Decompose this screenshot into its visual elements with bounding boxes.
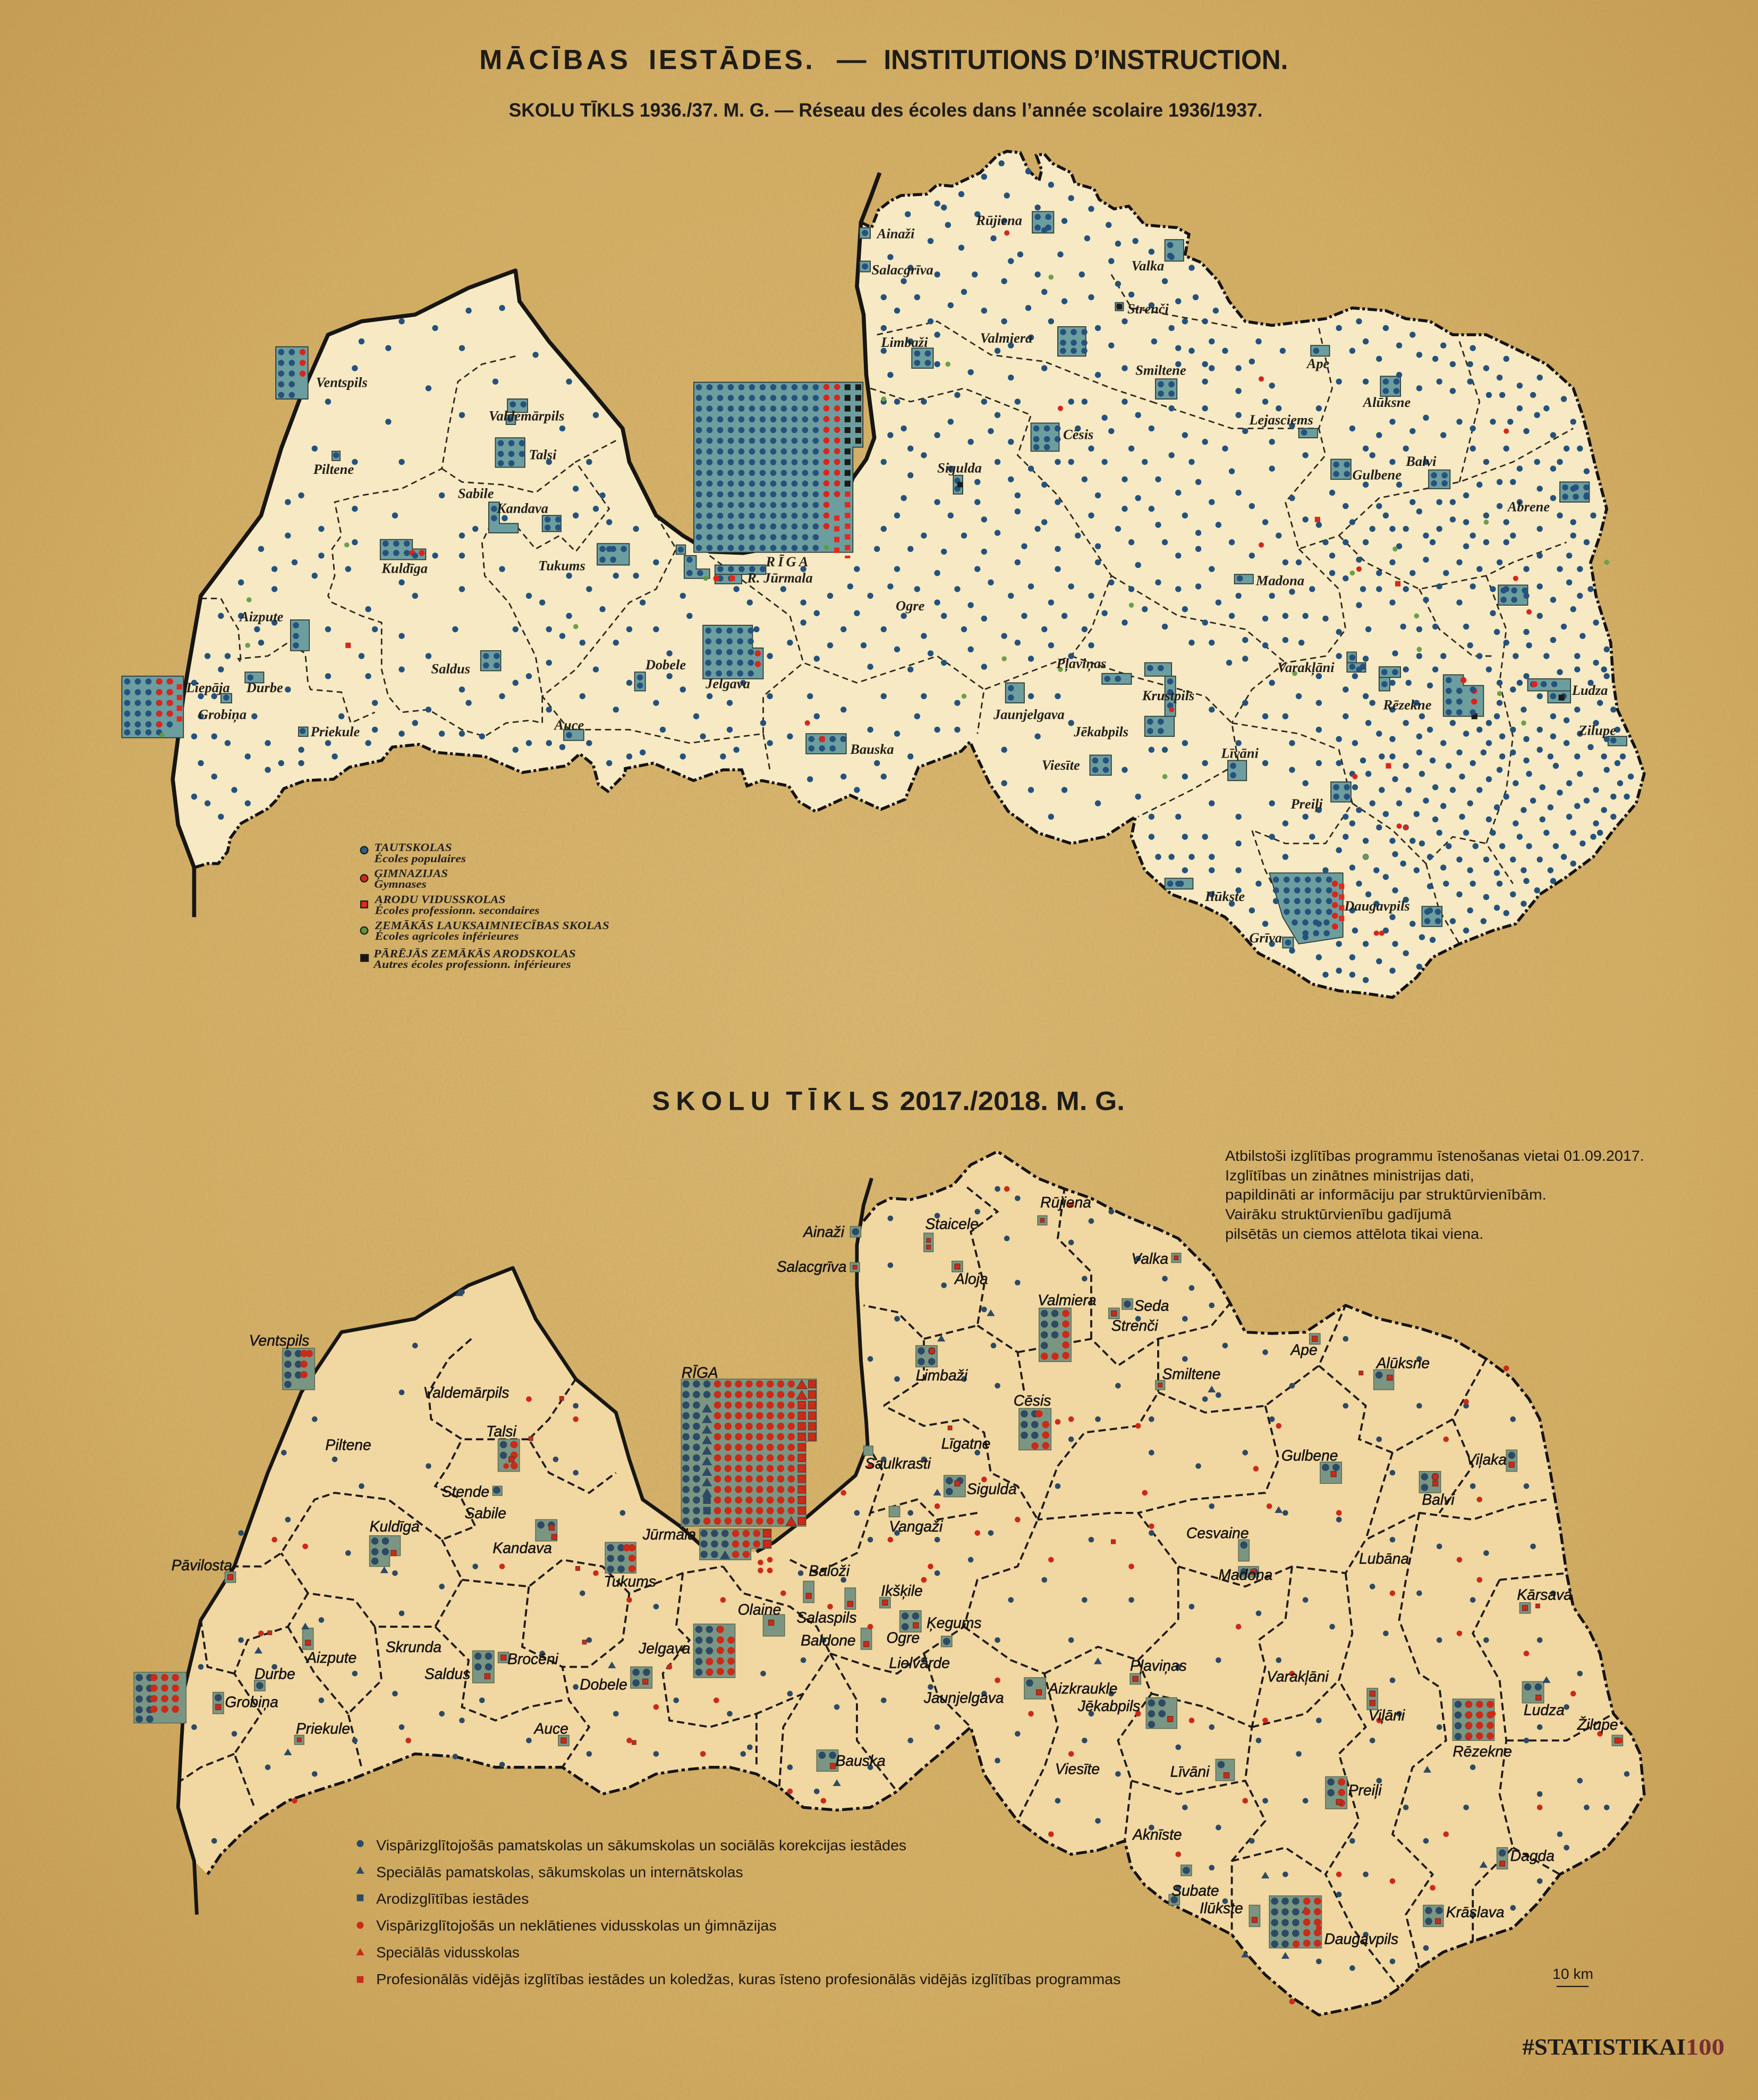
place names 1936: Ilūkste <box>1204 888 1245 904</box>
legend 2017/18: Profesionālās vidējās izglītības iestādes un koledžas, kuras īsteno profesionālās vidējās izglītības programmas <box>376 1971 1120 1987</box>
place names 2017: Kuldīga <box>370 1518 420 1535</box>
place names 2017: Žilupe <box>1577 1716 1618 1733</box>
place names 2017: Seda <box>1134 1297 1169 1314</box>
place names 2017: Baloži <box>809 1562 850 1579</box>
red school marks in blocks 2017 <box>154 1313 1490 1944</box>
place names 1936: Dobele <box>645 657 686 673</box>
place names 1936: RĪGA <box>766 554 811 569</box>
place names 2017: Balvi <box>1422 1491 1455 1508</box>
place names 2017: Kandava <box>492 1539 552 1556</box>
place names 2017: Piltene <box>325 1436 371 1453</box>
source note: pilsētās un ciemos attēlota tikai viena. <box>1225 1226 1483 1242</box>
school dots inside blocks 1936 <box>127 217 1623 942</box>
place names 1936: Lejasciems <box>1249 412 1313 428</box>
place names 2017: Olaine <box>738 1601 781 1618</box>
place names 2017: Alūksne <box>1375 1355 1430 1372</box>
place names 2017: Saulkrasti <box>865 1455 931 1472</box>
land border dash-dot 1936 <box>194 151 1644 998</box>
place names 2017: Strenči <box>1111 1317 1158 1334</box>
place names 2017: Tukums <box>604 1572 656 1589</box>
place names 1936: Jelgava <box>705 675 750 691</box>
place names 2017: Bauska <box>836 1752 886 1769</box>
place names 1936: R. Jūrmala <box>746 569 813 585</box>
title <box>479 44 1288 75</box>
place names 2017: Ludza <box>1524 1701 1565 1718</box>
place names 1936: Talsi <box>529 446 557 462</box>
land border 2017 <box>208 1151 1644 2015</box>
place names 2017 <box>172 1194 1618 1947</box>
place names 2017: Brocēni <box>507 1651 559 1668</box>
place names 2017: Salaspils <box>797 1609 856 1626</box>
coastline 1936 <box>173 173 880 917</box>
place names 2017: Preiļi <box>1348 1782 1382 1799</box>
place names 2017: Ventspils <box>249 1332 309 1349</box>
legend markers 1936 <box>361 847 368 962</box>
place names 1936: Preiļi <box>1290 796 1323 813</box>
legend 1936/37: Écoles professionn. secondaires <box>375 904 540 916</box>
place names 1936: Valmiera <box>980 330 1032 346</box>
place names 2017: Subate <box>1171 1882 1219 1899</box>
institution blocks 2017 <box>134 1215 1623 1948</box>
agricultural school dots 1936 <box>248 277 1607 857</box>
map 2017/18 <box>134 1151 1644 2015</box>
place names 2017: Jelgava <box>638 1639 690 1656</box>
legend 1936/37: Gymnases <box>374 878 427 890</box>
place names 1936: Sigulda <box>937 460 982 476</box>
place names 1936: Pļaviņas <box>1056 656 1106 673</box>
place names 2017: Rēzekne <box>1453 1743 1512 1760</box>
coastline 2017 <box>178 1178 872 1915</box>
place names 2017: Baldone <box>801 1631 856 1648</box>
land 2017 <box>178 1151 1644 2015</box>
place names 2017: Auce <box>533 1720 568 1737</box>
secondary schools 2017 <box>261 1189 1620 2002</box>
place names 2017: Lubāna <box>1359 1550 1409 1567</box>
place names 1936: Auce <box>553 717 584 733</box>
place names 1936: Ape <box>1306 355 1330 371</box>
heading 2017/18: SKOLU <box>652 1085 770 1116</box>
place names 2017: Viļāni <box>1369 1706 1405 1723</box>
legend 1936/37: Écoles agricoles inférieures <box>375 930 519 942</box>
heading 2017/18 <box>652 1085 1125 1116</box>
heading 2017/18: TĪKLS <box>786 1085 889 1116</box>
land 1936 <box>173 151 1644 998</box>
place names 1936: Grobiņa <box>198 706 247 723</box>
place names 1936: Tukums <box>538 558 585 574</box>
place names 2017: Ķegums <box>927 1614 981 1631</box>
place names 1936: Limbaži <box>880 334 928 350</box>
place names 2017: Talsi <box>486 1423 517 1440</box>
place names 1936: Abrene <box>1507 499 1550 515</box>
place names 2017: Dagda <box>1510 1847 1555 1864</box>
legend 1936/37: ZEMĀKĀS LAUKSAIMNIECĪBAS SKOLAS <box>375 919 609 932</box>
place names 1936: Daugavpils <box>1344 898 1410 914</box>
title: INSTITUTIONS D’INSTRUCTION. <box>884 44 1288 75</box>
place names 2017: Madona <box>1218 1566 1272 1583</box>
place names 1936: Sabile <box>458 486 494 501</box>
place names 2017: Kārsava <box>1517 1586 1572 1603</box>
source note: Izglītības un zinātnes ministrijas dati, <box>1225 1167 1474 1184</box>
place names 1936 <box>185 212 1616 946</box>
place names 2017: Vangaži <box>889 1518 943 1535</box>
place names 2017: Cēsis <box>1014 1392 1051 1409</box>
place names 1936: Aizpute <box>239 608 284 624</box>
place names 1936: Līvāni <box>1220 745 1259 761</box>
place names 1936: Rūjiena <box>975 212 1022 228</box>
legend 1936/37: Écoles populaires <box>373 852 466 865</box>
place names 2017: Limbaži <box>916 1366 968 1383</box>
place names 2017: Valka <box>1132 1250 1168 1267</box>
place names 2017: Aizpute <box>305 1649 356 1666</box>
place names 1936: Valdemārpils <box>489 407 564 423</box>
place names 1936: Kandava <box>496 500 548 516</box>
place names 1936: Grīva <box>1249 930 1282 946</box>
legend 1936/37: ARODU VIDUSSKOLAS <box>373 893 506 906</box>
gymnasium and secondary dots in blocks 1936 <box>159 352 1534 937</box>
place names 1936: Balvi <box>1405 453 1437 469</box>
place names 2017: Valmiera <box>1038 1291 1096 1308</box>
place names 2017: Gulbene <box>1281 1447 1338 1464</box>
place names 2017: Jaunjelgava <box>923 1689 1004 1706</box>
place names 2017: Lielvārde <box>889 1654 950 1671</box>
vocational squares 1936 <box>345 520 1400 766</box>
place names 1936: Valka <box>1132 258 1164 274</box>
place names 2017: Sigulda <box>967 1481 1017 1498</box>
place names 2017: Staicele <box>925 1215 979 1232</box>
place names 1936: Liepāja <box>185 679 230 695</box>
legend 1936/37: Autres écoles professionn. inférieures <box>372 958 571 971</box>
place names 2017: Skrunda <box>386 1638 441 1655</box>
gymnasium dots 1936 <box>808 233 1529 933</box>
place names 1936: Ludza <box>1572 682 1608 698</box>
place names 2017: Līvāni <box>1170 1763 1210 1780</box>
place names 2017: Durbe <box>254 1665 295 1682</box>
hashtag watermark: 100 <box>1686 2035 1725 2060</box>
place names 2017: RĪGA <box>682 1364 718 1381</box>
place names 2017: Aloja <box>954 1270 988 1287</box>
map 1936/37 <box>122 151 1644 998</box>
blue school marks in blocks 2017 <box>139 1232 1539 1944</box>
place names 2017: Līgatne <box>941 1435 990 1452</box>
place names 1936: Jēkabpils <box>1073 724 1128 739</box>
place names 2017: Smiltene <box>1162 1365 1220 1382</box>
place names 2017: Ape <box>1289 1341 1318 1358</box>
place names 2017: Viļaka <box>1466 1451 1507 1468</box>
legend 1936/37: TAUTSKOLAS <box>374 841 452 854</box>
legend markers 2017 <box>356 1840 364 1983</box>
place names 1936: Saldus <box>431 661 470 677</box>
legend 1936/37: ĢIMNAZIJAS <box>374 867 448 880</box>
legend 1936/37 <box>361 841 609 971</box>
place names 2017: Dobele <box>580 1676 627 1693</box>
place names 2017: Varakļāni <box>1267 1668 1329 1685</box>
legend 2017/18: Arodizglītības iestādes <box>376 1891 529 1907</box>
place names 2017: Daugavpils <box>1324 1930 1398 1947</box>
place names 1936: Madona <box>1255 572 1304 588</box>
place names 2017: Rūjiena <box>1040 1194 1091 1211</box>
place names 2017: Ilūkste <box>1200 1899 1243 1916</box>
source note: Vairāku struktūrvienību gadījumā <box>1225 1206 1451 1222</box>
place names 1936: Ventspils <box>316 374 368 390</box>
legend 2017/18: Speciālās pamatskolas, sākumskolas un internātskolas <box>376 1864 743 1880</box>
heading 2017/18: 2017./2018. M. G. <box>900 1085 1125 1116</box>
place names 2017: Jēkabpils <box>1077 1697 1140 1714</box>
legend 2017/18 <box>356 1837 1120 1987</box>
place names 2017: Grobiņa <box>225 1693 278 1710</box>
place names 2017: Pļaviņas <box>1130 1657 1187 1674</box>
place names 1936: Alūksne <box>1362 394 1411 410</box>
place names 1936: Jaunjelgava <box>993 706 1065 722</box>
title: MĀCĪBAS <box>479 44 628 75</box>
place names 1936: Gulbene <box>1352 466 1402 482</box>
popular schools dots 1936 <box>201 164 1631 980</box>
general schools 2017 <box>194 1189 1627 1968</box>
legend 2017/18: Vispārizglītojošās un neklātienes vidusskolas un ģimnāzijas <box>376 1917 777 1934</box>
place names 1936: Krustpils <box>1142 687 1194 703</box>
source note: papildināti ar informāciju par struktūrvienībām. <box>1225 1186 1547 1203</box>
place names 2017: Sabile <box>465 1504 506 1521</box>
title: — <box>837 44 867 75</box>
legend 2017/18: Vispārizglītojošās pamatskolas un sākumskolas un sociālās korekcijas iestādes <box>376 1837 906 1854</box>
place names 2017: Saldus <box>424 1665 470 1682</box>
place names 1936: Zilupe <box>1578 722 1616 738</box>
place names 2017: Pāvilosta <box>172 1557 232 1574</box>
place names 2017: Priekule <box>296 1720 350 1737</box>
additional dots, dense eastern region 1936 <box>194 208 1620 975</box>
institution blocks 1936 <box>122 211 1627 948</box>
place names 2017: Aknīste <box>1132 1826 1182 1843</box>
place names 2017: Krāslava <box>1446 1903 1505 1920</box>
place names 1936: Rēzekne <box>1382 697 1432 713</box>
place names 2017: Viesīte <box>1055 1760 1100 1777</box>
place names 1936: Cēsis <box>1063 427 1093 443</box>
place names 1936: Bauska <box>850 741 894 757</box>
legend 2017/18: Speciālās vidusskolas <box>376 1944 520 1961</box>
place names 2017: Ogre <box>886 1629 920 1646</box>
place names 2017: Jūrmala <box>642 1526 696 1543</box>
place names 1936: Durbe <box>246 679 283 695</box>
place names 2017: Ainaži <box>802 1223 845 1240</box>
district boundaries 1936 <box>201 275 1573 944</box>
place names 1936: Strenči <box>1127 301 1169 317</box>
place names 1936: Salacgrīva <box>872 262 933 278</box>
place names 1936: Kuldīga <box>381 560 428 576</box>
title: IESTĀDES. <box>649 44 813 75</box>
scale bar: 10 km <box>1552 1966 1593 1982</box>
subtitle 1936/37: SKOLU TĪKLS 1936./37. M. G. — Réseau des écoles dans l’année scolaire 1936/1937. <box>509 99 1263 121</box>
legend 1936/37: PĀRĒJĀS ZEMĀKĀS ARODSKOLAS <box>373 947 576 960</box>
place names 1936: Priekule <box>310 724 360 739</box>
place names 1936: Varakļāni <box>1277 659 1335 676</box>
place names 1936: Ainaži <box>876 226 915 242</box>
place names 2017: Valdemārpils <box>423 1384 509 1401</box>
place names 1936: Smiltene <box>1135 362 1186 378</box>
place names 1936: Viesīte <box>1042 757 1080 773</box>
place names 2017: Ikšķile <box>881 1582 923 1599</box>
source note: Atbilstoši izglītības programmu īstenošanas vietai 01.09.2017. <box>1225 1147 1644 1164</box>
source note <box>1225 1147 1644 1242</box>
place names 2017: Stende <box>442 1483 489 1500</box>
place names 1936: Ogre <box>896 598 925 614</box>
hashtag watermark: #STATISTIKAI <box>1522 2035 1686 2060</box>
place names 1936: Piltene <box>313 461 354 477</box>
municipality boundaries 2017 <box>181 1185 1613 1988</box>
place names 2017: Aizkraukle <box>1047 1680 1117 1697</box>
place names 2017: Cesvaine <box>1186 1525 1249 1542</box>
place names 2017: Salacgrīva <box>777 1258 846 1275</box>
